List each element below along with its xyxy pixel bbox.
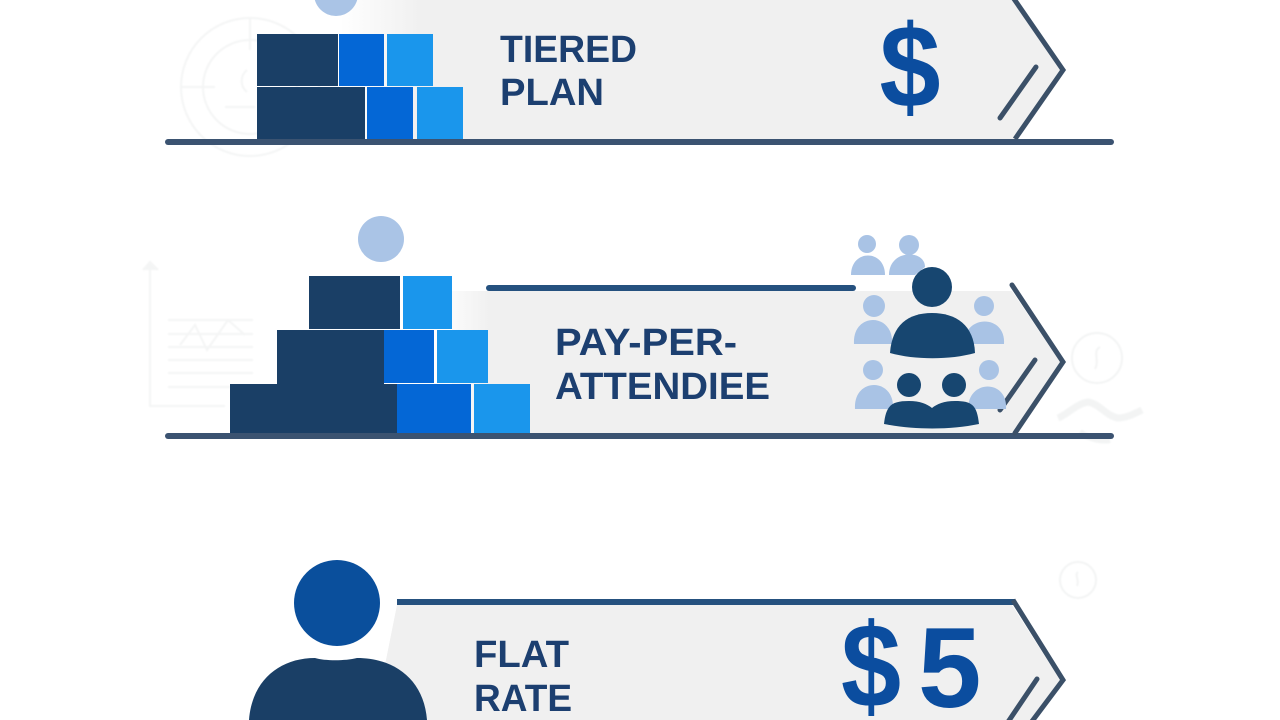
heading xyxy=(474,634,572,720)
price xyxy=(841,600,981,720)
panel: tiered plan xyxy=(165,0,1114,156)
arrow panel background xyxy=(452,291,1060,433)
panel: flat rate xyxy=(249,560,1096,720)
heading: TIERED xyxy=(500,29,637,71)
chevron arrow xyxy=(1012,285,1063,433)
chevron slash xyxy=(1000,360,1035,410)
chevron arrow xyxy=(1013,600,1063,720)
icon: attendees group xyxy=(851,235,1006,428)
faint coin xyxy=(1060,562,1096,598)
heading: PLAN xyxy=(500,72,604,114)
heading xyxy=(555,322,770,408)
heading: RATE xyxy=(474,678,572,720)
floor line xyxy=(165,139,1114,145)
stacked blocks xyxy=(230,276,530,433)
top rule xyxy=(397,599,1015,605)
person head xyxy=(294,560,380,646)
heading: FLAT xyxy=(474,634,569,676)
heading: ATTENDIEE xyxy=(555,366,770,408)
floor line xyxy=(165,433,1114,439)
arrow panel background xyxy=(385,605,1060,720)
chevron slash xyxy=(1000,67,1036,118)
heading: PAY-PER- xyxy=(555,322,737,364)
chevron arrow xyxy=(1012,0,1063,139)
dollar sign: $ xyxy=(879,1,941,133)
top rule xyxy=(486,285,856,291)
head circle xyxy=(314,0,358,16)
faint chart xyxy=(143,262,253,406)
stacked blocks xyxy=(257,34,463,140)
head circle xyxy=(358,216,404,262)
chevron slash xyxy=(1008,679,1037,720)
faint target icon xyxy=(181,18,319,156)
person body xyxy=(249,658,427,720)
heading xyxy=(500,29,637,114)
faint coin and people xyxy=(1058,333,1142,441)
arrow panel background xyxy=(340,0,1060,139)
panel: pay-per-attendee xyxy=(143,216,1142,441)
